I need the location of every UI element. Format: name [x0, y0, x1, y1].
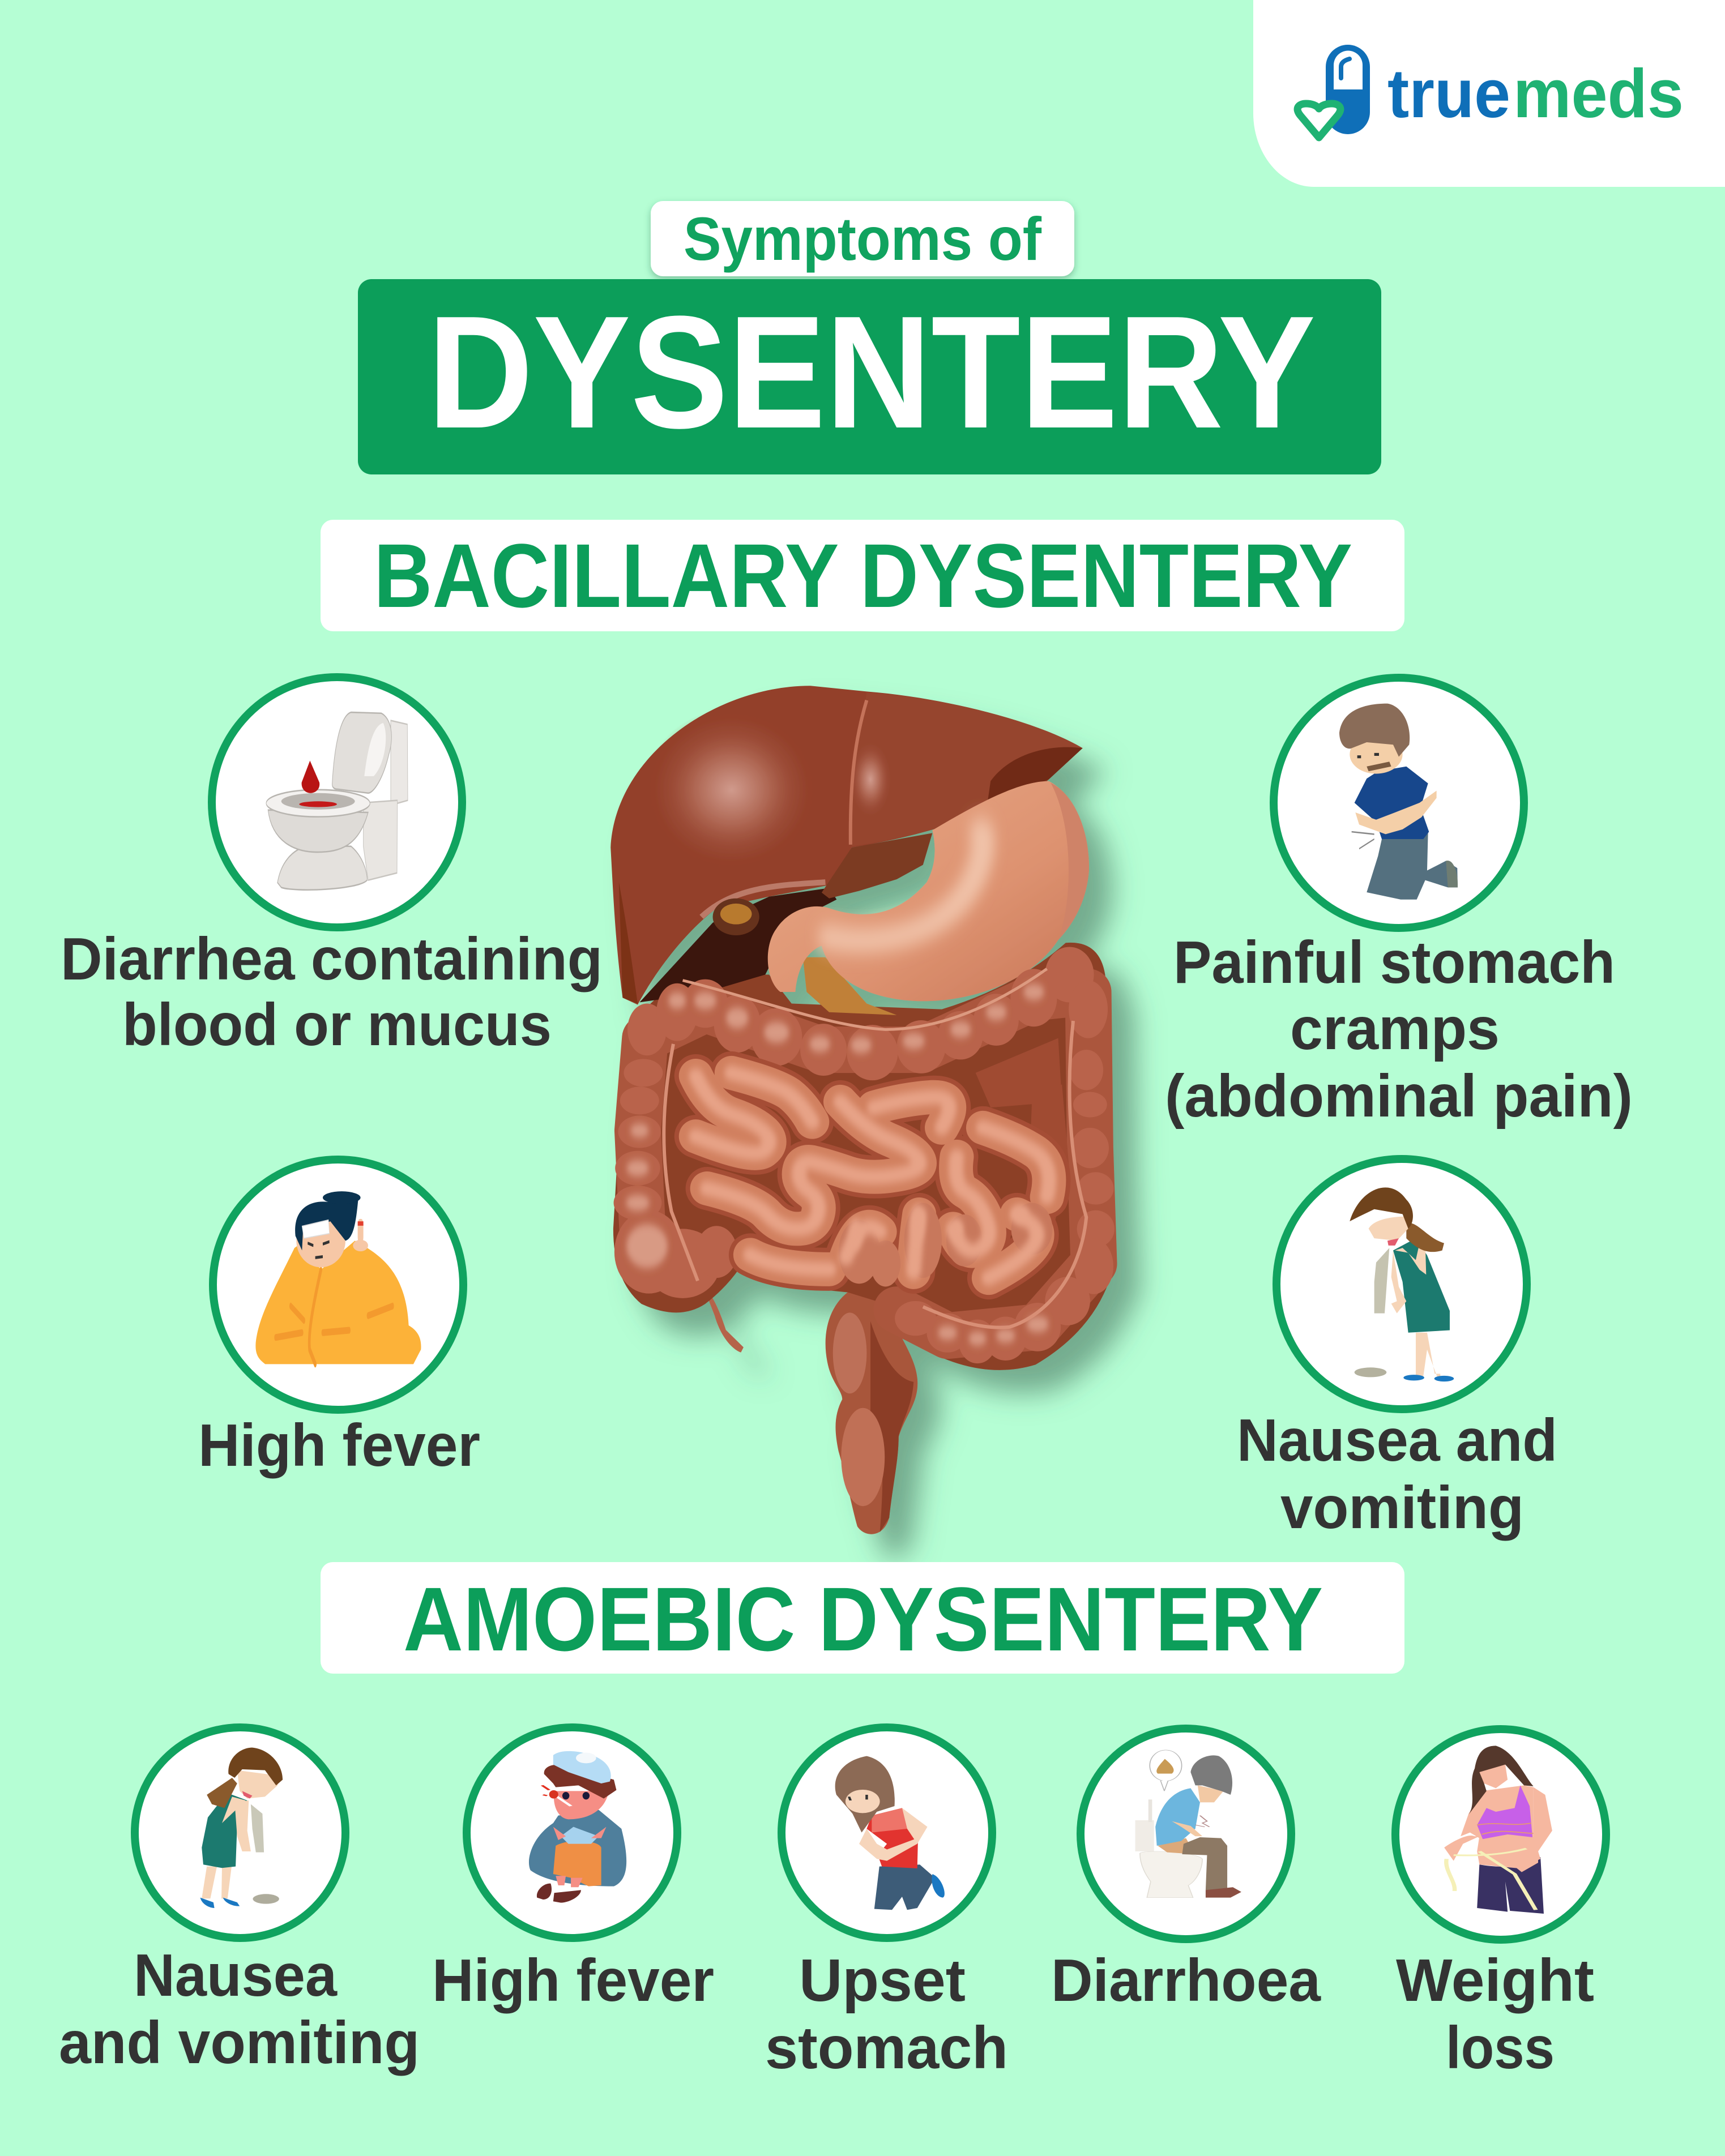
caudate lobe	[822, 833, 932, 899]
label	[61, 926, 603, 1058]
icon: boy with ice pack and thermometer	[529, 1751, 626, 1903]
label: Diarrhea containing	[61, 926, 603, 993]
title banner: DYSENTERY	[428, 283, 1316, 461]
heading: amoebic dysentery: AMOEBIC DYSENTERY	[403, 1568, 1323, 1670]
panel: bacillary symptom - nausea	[1237, 1159, 1557, 1541]
icon ring	[1276, 1159, 1527, 1409]
label: High fever	[198, 1412, 480, 1479]
panel: bacillary symptom - diarrhea	[61, 677, 603, 1058]
under-liver shadow	[639, 888, 836, 1002]
icon ring	[782, 1727, 992, 1938]
liver	[610, 686, 1083, 1004]
label: and vomiting	[59, 2009, 420, 2076]
label: Nausea	[134, 1942, 338, 2009]
label: Nausea and	[1237, 1407, 1557, 1474]
heading: bacillary dysentery: BACILLARY DYSENTERY	[374, 525, 1352, 626]
label: vomiting	[1280, 1474, 1524, 1541]
pancreas	[803, 957, 896, 1015]
icon: man on toilet	[1135, 1750, 1241, 1898]
icon: man holding stomach	[1339, 704, 1458, 900]
label: High fever	[432, 1947, 714, 2014]
label	[1396, 1947, 1594, 2081]
panel: amoebic symptom - diarrhoea	[1051, 1729, 1321, 2014]
icon ring	[467, 1727, 677, 1938]
small intestine	[696, 1038, 1069, 1286]
large intestine teniae and haustra	[614, 947, 1115, 1363]
gallbladder	[713, 899, 759, 935]
rectum	[826, 1290, 917, 1534]
panel: amoebic symptom - high fever	[432, 1727, 714, 2014]
icon ring	[1081, 1729, 1291, 1939]
label: Upset	[799, 1947, 966, 2014]
label: blood or mucus	[122, 991, 552, 1058]
large intestine body	[613, 943, 1116, 1370]
stomach	[768, 781, 1089, 1001]
logo wordmark	[1387, 55, 1684, 132]
subtitle pill: Symptoms of	[684, 204, 1042, 273]
logo wordmark: meds	[1513, 55, 1684, 132]
icon: toilet with blood	[266, 712, 408, 890]
appendix	[703, 1286, 744, 1353]
icon ring	[1274, 678, 1524, 928]
logo wordmark: true	[1387, 55, 1510, 132]
icon: woman kneeling holding stomach	[835, 1756, 945, 1910]
icon: woman vomiting	[200, 1748, 283, 1908]
panel: amoebic symptom - nausea	[59, 1727, 420, 2076]
panel: amoebic symptom - upset stomach	[765, 1727, 1008, 2081]
icon: woman measuring waist	[1444, 1746, 1552, 1914]
label: Painful stomach	[1173, 929, 1615, 996]
panel: bacillary symptom - stomach cramps	[1165, 678, 1633, 1130]
label	[59, 1942, 420, 2076]
panel: amoebic symptom - weight loss	[1395, 1729, 1606, 2081]
icon ring	[213, 1160, 463, 1410]
label: (abdominal pain)	[1165, 1063, 1633, 1130]
panel: bacillary symptom - high fever	[198, 1160, 480, 1479]
label: Diarrhoea	[1051, 1947, 1321, 2014]
icon ring	[135, 1727, 345, 1938]
icon ring	[1395, 1729, 1606, 1940]
label	[1237, 1407, 1557, 1541]
label: stomach	[765, 2014, 1008, 2081]
label	[1165, 929, 1633, 1130]
label: cramps	[1290, 995, 1500, 1062]
icon ring	[212, 677, 462, 927]
label: loss	[1446, 2014, 1555, 2081]
icon: woman vomiting	[1350, 1187, 1454, 1381]
colon base band	[638, 992, 1094, 1336]
icon: person in blanket with fever	[255, 1191, 421, 1364]
icon: capsule and heart logo	[1297, 45, 1370, 138]
illustration: digestive organs	[610, 686, 1116, 1534]
label: Weight	[1396, 1947, 1594, 2014]
label	[765, 1947, 1008, 2081]
logo panel	[1253, 0, 1725, 187]
